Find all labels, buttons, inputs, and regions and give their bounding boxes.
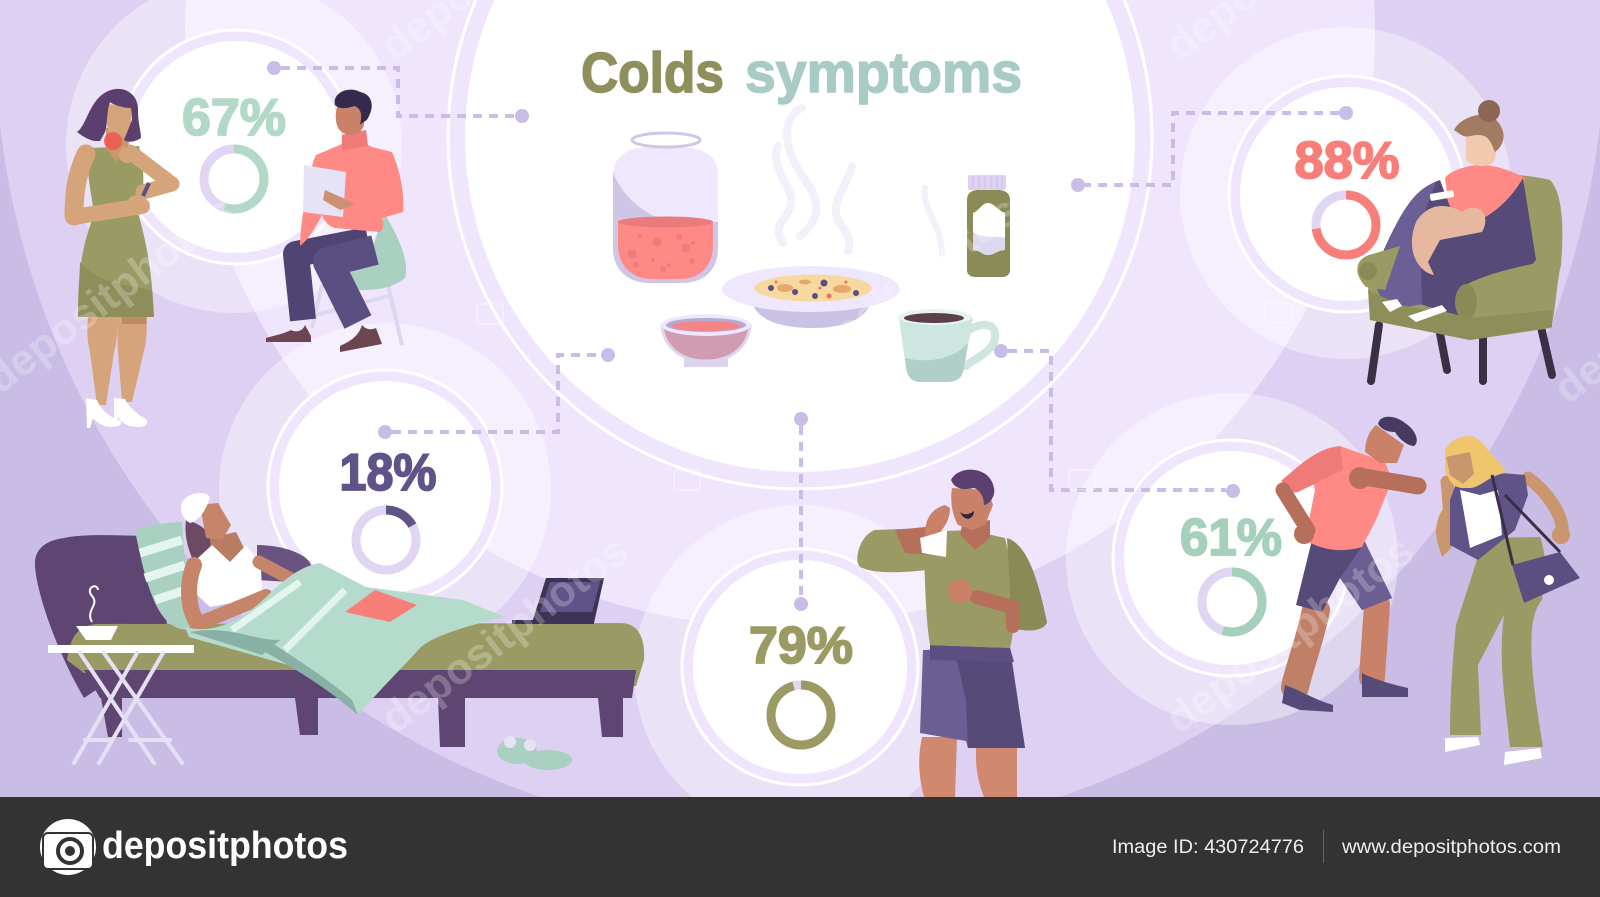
donut 88% label: 88% — [1294, 132, 1400, 190]
image id: Image ID: 430724776 — [1112, 837, 1304, 858]
connector: 61% to centre — [994, 344, 1240, 498]
donut 88% label — [1294, 132, 1400, 255]
figure: sneezing man — [857, 470, 1047, 797]
connector: 18% to centre — [378, 348, 615, 439]
donut 18% label: 18% — [340, 444, 436, 502]
icon: mug — [898, 309, 995, 382]
laptop — [512, 578, 604, 624]
connector: 88% to centre — [1071, 106, 1353, 192]
blanket — [185, 563, 505, 715]
figure: woman in armchair — [1357, 100, 1562, 381]
pillow — [135, 522, 190, 630]
panel: 88% circle — [1180, 27, 1512, 359]
panel: 67% circle — [66, 0, 402, 313]
logo icon — [40, 819, 96, 875]
donut 67% label — [182, 89, 286, 209]
panel: 18% circle — [219, 323, 551, 655]
footer banner — [0, 797, 1600, 897]
connector: 67% to centre — [267, 61, 529, 123]
donut 79% label: 79% — [749, 617, 853, 675]
sick woman — [181, 493, 334, 624]
panel: 79% circle — [634, 505, 966, 837]
donut 61% label: 61% — [1180, 509, 1282, 567]
icon: medicine bottle — [967, 175, 1010, 277]
figure: seated man with paper — [266, 90, 406, 352]
slippers — [497, 736, 572, 770]
donut 79% label — [749, 617, 853, 745]
donut 18% label — [340, 444, 436, 570]
donut 67% label: 67% — [182, 89, 286, 147]
watermarks: depositphotos — [1157, 526, 1423, 743]
watermarks: depositphotos — [762, 186, 1028, 403]
panel: 61% circle — [1066, 393, 1398, 725]
title: symptoms — [745, 41, 1022, 105]
figure: blonde woman with bag — [1443, 436, 1580, 765]
title: Colds — [581, 41, 724, 105]
table with cup — [48, 586, 194, 763]
icon: jar of jam — [613, 133, 718, 283]
connector: 79% to centre — [794, 412, 808, 611]
icon: soup steam — [776, 108, 942, 254]
watermark camera marks — [281, 134, 1291, 657]
icon: soup plate — [722, 266, 900, 328]
website: www.depositphotos.com — [1341, 837, 1561, 858]
donut 61% label — [1180, 509, 1282, 632]
icon: bowl of broth — [661, 314, 751, 367]
figure: woman on sofa with laptop and table — [35, 493, 644, 770]
logo wordmark: depositphotos — [102, 825, 348, 867]
watermarks: depositphotos — [372, 526, 638, 743]
figure: woman with sore throat — [74, 89, 172, 428]
tablet — [345, 590, 417, 622]
figure: man coughing into elbow — [1280, 417, 1418, 712]
central circle panel — [448, 0, 1152, 489]
sofa — [35, 535, 644, 747]
